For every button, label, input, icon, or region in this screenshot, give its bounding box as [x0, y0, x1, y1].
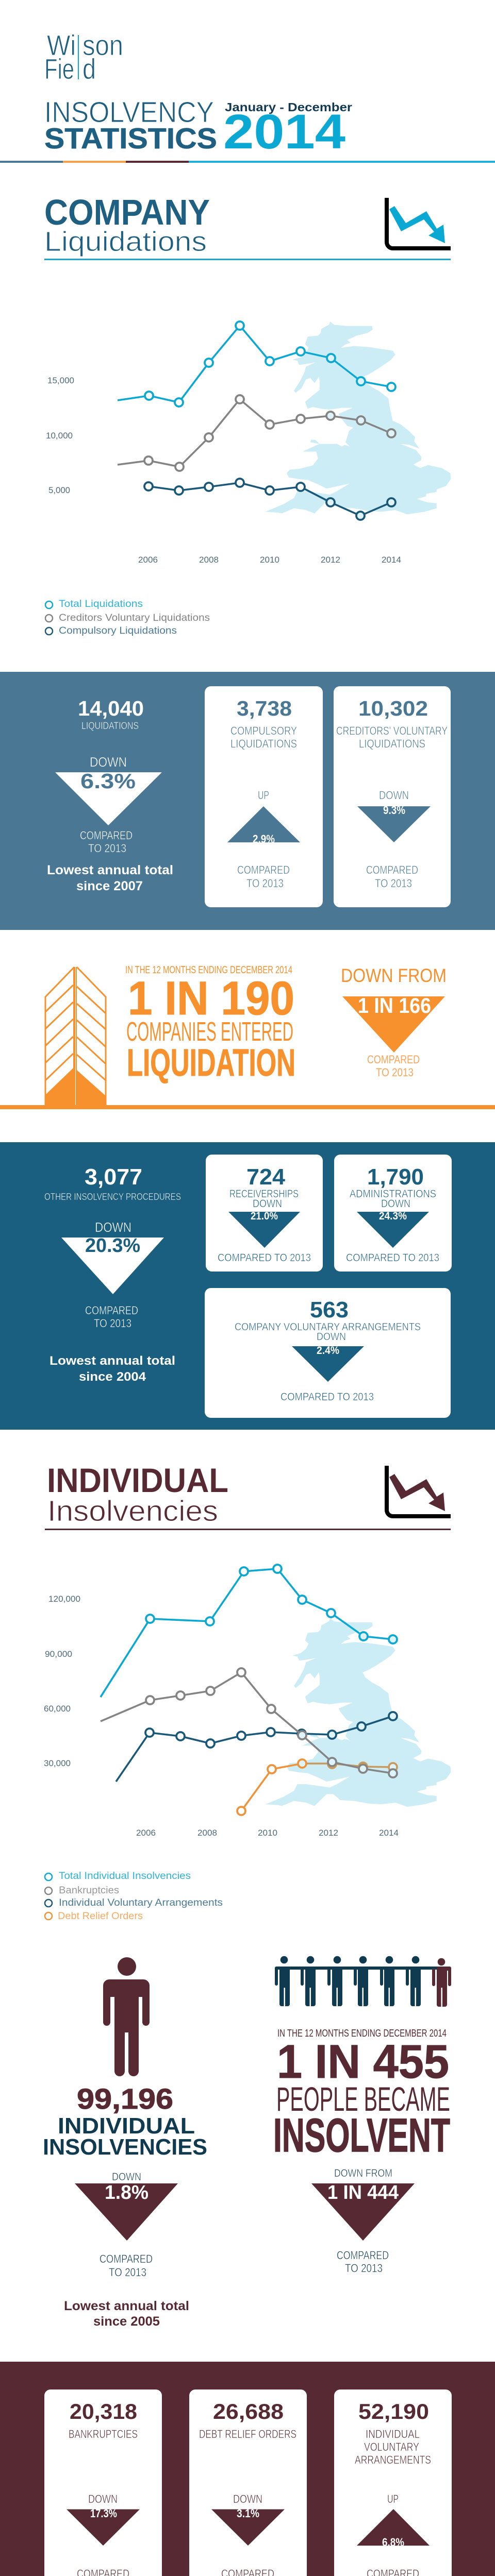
stat: 3,077 other procedures	[44, 1164, 181, 1384]
y axis labels: 15,000	[47, 376, 74, 385]
text: lowest annual total	[64, 2299, 189, 2329]
x axis labels	[136, 1828, 399, 1838]
legend: individual insolvencies	[45, 1871, 223, 1922]
logo: Wilson Field	[44, 29, 123, 85]
triangle: down 1.8%: 1.8%	[105, 2182, 148, 2204]
card: receiverships: DOWN	[253, 1198, 282, 1210]
card: creditors voluntary liquidations: TO 2013	[375, 877, 412, 890]
y axis labels: 120,000	[48, 1594, 80, 1604]
x axis labels: 2014	[382, 555, 401, 565]
x axis labels: 2006	[136, 1828, 156, 1838]
text: down from: DOWN FROM	[341, 965, 447, 986]
triangle: 1 in 444: 1 IN 444	[327, 2182, 399, 2204]
legend: company liquidations: Creditors Voluntary Liquidations	[59, 613, 210, 623]
card: debt relief orders: 3.1%	[237, 2507, 259, 2520]
section: 99,196 individual insolvencies	[43, 1957, 207, 2329]
text: down: DOWN	[112, 2171, 141, 2183]
card: administrations: 24.3%	[379, 1210, 407, 1222]
panel: other insolvency procedures	[0, 1142, 495, 1430]
card: compulsory liquidations: 2.9%	[253, 833, 275, 845]
text: down from: DOWN FROM	[334, 2167, 392, 2179]
card: compulsory liquidations	[205, 686, 323, 907]
card: compulsory liquidations: COMPULSORY	[230, 724, 297, 737]
card: receiverships: 21.0%	[251, 1210, 278, 1222]
stat: 14,040 liquidations: LIQUIDATIONS	[81, 721, 139, 732]
x axis labels: 2008	[197, 1828, 217, 1838]
card: company voluntary arrangements	[205, 1288, 451, 1418]
card: receiverships	[206, 1155, 323, 1272]
series: total individual insolvencies	[101, 1565, 397, 1697]
stat: 14,040 liquidations: Lowest annual total	[47, 863, 173, 877]
card: company voluntary arrangements: COMPANY VOLUNTARY ARRANGEMENTS	[235, 1321, 421, 1333]
heading: Individual Insolvencies	[45, 1461, 451, 1530]
text: compared to 2013: TO 2013	[376, 1066, 414, 1079]
card: bankruptcies	[44, 2389, 162, 2576]
card: debt relief orders: 26,688	[213, 2399, 284, 2424]
card: company voluntary arrangements: 563	[310, 1297, 349, 1323]
icon: falling chart	[387, 1466, 451, 1516]
icon: falling chart	[387, 198, 451, 248]
stat: 3,077 other procedures: COMPARED	[85, 1304, 138, 1317]
card: individual voluntary arrangements: ARRANGEMENTS	[355, 2453, 431, 2466]
heading text: Liquidations: Liquidations	[44, 226, 207, 257]
logo: Wilson Field: Fie	[44, 53, 74, 85]
x axis labels: 2008	[199, 555, 219, 565]
text: companies entered: COMPANIES ENTERED	[126, 1017, 293, 1047]
x axis labels: 2010	[260, 555, 279, 565]
series: creditors voluntary liquidations	[118, 395, 395, 471]
card: bankruptcies: 20,318	[70, 2399, 137, 2424]
heading text: Insolvencies: Insolvencies	[47, 1495, 218, 1528]
card: administrations	[334, 1155, 452, 1272]
y axis labels: 60,000	[44, 1704, 71, 1714]
text: liquidation: LIQUIDATION	[127, 1041, 295, 1084]
section: 1 in 190 companies	[0, 964, 495, 1109]
section: 1 in 455 people	[273, 1956, 451, 2275]
triangle: down 1.8%	[75, 2182, 178, 2241]
card: debt relief orders: DEBT RELIEF ORDERS	[199, 2428, 296, 2441]
y axis labels: 10,000	[46, 431, 73, 440]
card: creditors voluntary liquidations: LIQUIDATIONS	[359, 737, 425, 750]
date range: January - December	[225, 100, 352, 114]
stat: 14,040 liquidations: 6.3%	[80, 769, 136, 793]
y axis labels: 5,000	[48, 485, 70, 495]
card: compulsory liquidations: UP	[258, 789, 269, 802]
y axis labels	[46, 376, 74, 495]
triangle: 1 in 444	[311, 2182, 415, 2241]
series: total liquidations	[118, 321, 395, 406]
text: individual insolvencies	[43, 2113, 207, 2160]
logo: Wilson Field: Wi	[47, 29, 76, 61]
card: bankruptcies: DOWN	[88, 2493, 118, 2505]
card: compulsory liquidations: LIQUIDATIONS	[230, 737, 297, 750]
series: debt relief orders	[237, 1760, 397, 1815]
stat: 14,040 liquidations	[47, 697, 173, 893]
card: individual voluntary arrangements: 6.8%	[382, 2536, 404, 2549]
legend: individual insolvencies: Bankruptcies	[59, 1885, 119, 1896]
stat: 3,077 other procedures: 3,077	[85, 1164, 142, 1190]
stat: 14,040 liquidations: DOWN	[90, 754, 127, 770]
card: individual voluntary arrangements	[334, 2389, 452, 2576]
icon: person	[103, 1957, 150, 2076]
card: company voluntary arrangements: COMPARED TO 2013	[280, 1391, 374, 1403]
map: Great Britain	[265, 1618, 451, 1807]
x axis labels: 2010	[258, 1828, 277, 1838]
marker: debt relief orders 2011	[298, 1759, 306, 1768]
stat: 3,077 other procedures: OTHER INSOLVENCY PROCEDURES	[44, 1192, 181, 1202]
stat: 3,077 other procedures: 20.3%	[85, 1235, 140, 1257]
card: individual voluntary arrangements: INDIVIDUAL	[366, 2428, 420, 2441]
legend: individual insolvencies: Individual Voluntary Arrangements	[59, 1897, 223, 1908]
year: 2014	[223, 105, 345, 159]
heading text: Individual: INDIVIDUAL	[47, 1461, 228, 1499]
text: compared to 2013: TO 2013	[109, 2266, 146, 2279]
card: debt relief orders	[189, 2389, 307, 2576]
colour rule	[0, 161, 495, 163]
y axis labels: 90,000	[45, 1649, 72, 1659]
card: company voluntary arrangements: 2.4%	[317, 1345, 339, 1357]
card: individual voluntary arrangements: UP	[387, 2493, 399, 2505]
legend: individual insolvencies: Total Individual Insolvencies	[59, 1871, 191, 1882]
text: compared to 2013	[100, 2252, 153, 2279]
stat: 3,077 other procedures: Lowest annual total	[50, 1354, 175, 1368]
series: bankruptcies	[101, 1668, 397, 1777]
logo: Wilson Field: d	[82, 53, 96, 85]
card: bankruptcies: BANKRUPTCIES	[69, 2428, 138, 2441]
chart: individual insolvencies line chart	[44, 1565, 451, 1838]
y axis labels: 30,000	[44, 1758, 71, 1768]
text: compared to 2013: TO 2013	[345, 2262, 383, 2275]
legend: company liquidations: Total Liquidations	[59, 599, 143, 609]
icon: row of people	[275, 1956, 451, 2007]
card: creditors voluntary liquidations	[334, 686, 451, 907]
card: administrations: DOWN	[381, 1198, 410, 1210]
text: compared to 2013: COMPARED	[100, 2252, 153, 2265]
legend: individual insolvencies: Debt Relief Orders	[58, 1911, 143, 1922]
card: creditors voluntary liquidations: 10,302	[358, 697, 428, 720]
panel: liquidations totals	[0, 672, 495, 930]
triangle: 1 in 166: 1 IN 166	[358, 993, 431, 1018]
card: administrations: ADMINISTRATIONS	[350, 1188, 436, 1200]
x axis labels: 2014	[379, 1828, 399, 1838]
card: creditors voluntary liquidations: DOWN	[379, 789, 409, 802]
text: compared to 2013	[337, 2249, 389, 2275]
text: 12 months ending: IN THE 12 MONTHS ENDING DECEMBER 2014	[125, 964, 292, 976]
card: receiverships: 724	[246, 1164, 286, 1190]
x axis labels: 2012	[319, 1828, 338, 1838]
heading text: Company: COMPANY	[44, 192, 210, 232]
header: logo and title	[0, 29, 495, 163]
chart: company liquidations line chart	[46, 321, 451, 565]
x axis labels: 2006	[138, 555, 158, 565]
card: debt relief orders: DOWN	[233, 2493, 262, 2505]
text: lowest annual total: since 2005	[93, 2314, 160, 2329]
title: Insolvency: INSOLVENCY	[44, 96, 214, 129]
series: individual voluntary arrangements	[116, 1712, 397, 1782]
card: compulsory liquidations: COMPARED	[237, 863, 290, 876]
card: administrations: COMPARED TO 2013	[346, 1252, 439, 1264]
text: lowest annual total: Lowest annual total	[64, 2299, 189, 2313]
card: creditors voluntary liquidations: 9.3%	[383, 804, 405, 817]
icon: orange building	[45, 967, 106, 1105]
card: compulsory liquidations: TO 2013	[246, 877, 284, 890]
text: individual insolvencies: INSOLVENCIES	[43, 2134, 207, 2160]
stat: 3,077 other procedures: DOWN	[95, 1219, 131, 1235]
logo: Wilson Field: son	[82, 29, 123, 61]
card: administrations: 1,790	[367, 1164, 424, 1190]
stat: 14,040 liquidations: 14,040	[78, 697, 144, 720]
card: receiverships: COMPARED TO 2013	[218, 1252, 311, 1264]
card: individual voluntary arrangements: 52,190	[358, 2399, 429, 2424]
statistic: 1 in 190: 1 IN 190	[128, 972, 294, 1025]
card: bankruptcies: 17.3%	[90, 2507, 117, 2520]
panel: individual insolvency breakdown	[0, 2362, 495, 2576]
card: individual voluntary arrangements: VOLUNTARY	[364, 2441, 419, 2453]
card: creditors voluntary liquidations: COMPARED	[366, 863, 418, 876]
title: Statistics: STATISTICS	[44, 122, 217, 155]
heading: Company Liquidations	[44, 192, 451, 260]
statistic: 99,196: 99,196	[77, 2082, 173, 2115]
stat: 3,077 other procedures: since 2004	[79, 1370, 146, 1384]
card: compulsory liquidations: 3,738	[237, 697, 292, 720]
text: compared to 2013: COMPARED	[337, 2249, 389, 2262]
statistic: 1 in 455: 1 IN 455	[277, 2036, 449, 2088]
card: receiverships: RECEIVERSHIPS	[229, 1188, 299, 1200]
series: compulsory liquidations	[144, 479, 395, 520]
stat: 3,077 other procedures: TO 2013	[94, 1317, 131, 1330]
card: company voluntary arrangements: DOWN	[317, 1331, 346, 1343]
stat: 14,040 liquidations: since 2007	[76, 879, 143, 893]
stat: 14,040 liquidations: COMPARED	[80, 829, 133, 842]
x axis labels	[138, 555, 401, 565]
y axis labels	[44, 1594, 80, 1768]
text: individual insolvencies: INDIVIDUAL	[58, 2113, 195, 2139]
stat: 14,040 liquidations: TO 2013	[88, 842, 126, 855]
legend: company liquidations	[45, 599, 210, 636]
map: Great Britain	[265, 321, 451, 514]
triangle: 1 in 166	[342, 993, 445, 1053]
text: compared to 2013	[367, 1053, 420, 1079]
legend: company liquidations: Compulsory Liquidations	[59, 625, 177, 636]
card: creditors voluntary liquidations: CREDITORS' VOLUNTARY	[336, 724, 448, 737]
x axis labels: 2012	[321, 555, 340, 565]
text: compared to 2013: COMPARED	[367, 1053, 420, 1066]
